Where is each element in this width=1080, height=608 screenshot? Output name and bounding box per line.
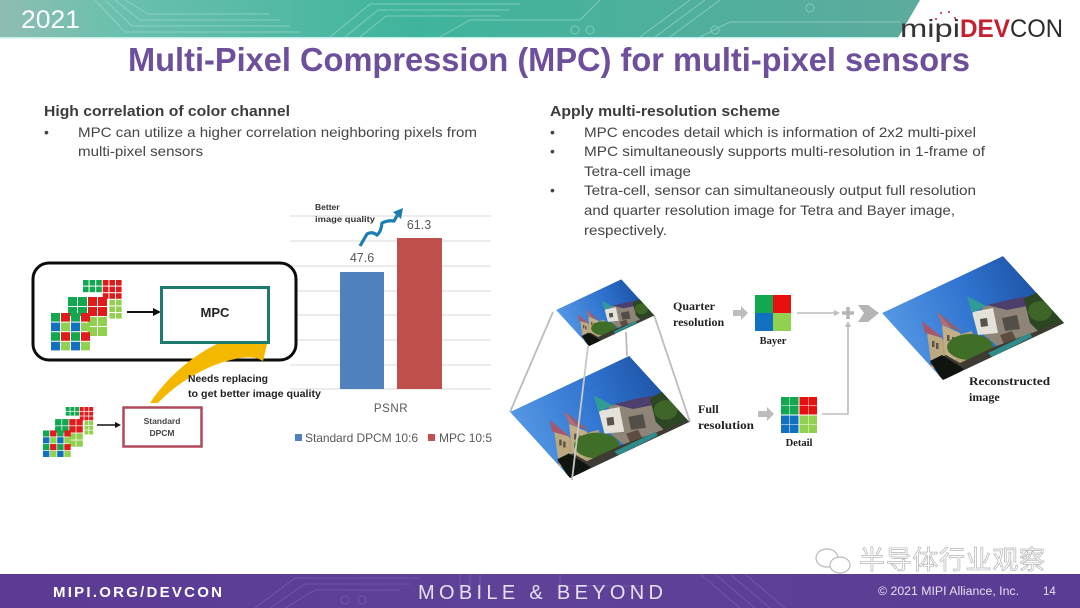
callout: needs replacing: to get better image quality bbox=[188, 388, 321, 400]
icon: wechat bbox=[816, 549, 850, 573]
icon: multi-pixel stack bbox=[51, 280, 122, 350]
arrow: full to Detail bbox=[758, 407, 774, 421]
right text block: • bbox=[550, 124, 555, 140]
image: quarter resolution bbox=[556, 279, 659, 349]
connector arrows to sum bbox=[797, 310, 851, 414]
footer bar bbox=[0, 574, 1080, 608]
label: reconstructed image: image bbox=[969, 390, 1000, 404]
right text block: • bbox=[550, 143, 555, 159]
callout: needs replacing bbox=[188, 373, 321, 400]
icon: small multi-pixel stack bbox=[43, 407, 93, 457]
diagram: multi-resolution pyramid bbox=[510, 279, 697, 483]
value 47.6: 47.6 bbox=[350, 251, 374, 265]
bar: MPC bbox=[397, 238, 442, 389]
box: Standard DPCM bbox=[124, 408, 202, 446]
pyramid front edge bbox=[572, 346, 588, 480]
left text block: multi-pixel sensors bbox=[78, 143, 203, 159]
panel: MPC pipeline bbox=[33, 263, 296, 360]
label: quarter resolution: Quarter bbox=[673, 299, 716, 313]
box: MPC bbox=[162, 288, 268, 342]
footer copyright: © 2021 MIPI Alliance, Inc. bbox=[878, 586, 1019, 598]
icon: plus bbox=[842, 307, 854, 319]
label: full resolution: resolution bbox=[698, 418, 754, 432]
callout: better image quality: Better bbox=[315, 202, 340, 212]
right text block: Tetra-cell, sensor can simultaneously output full resolution bbox=[584, 182, 976, 198]
panel: standard DPCM pipeline bbox=[43, 407, 202, 457]
logo: mipi DEVCON: mipi bbox=[900, 15, 960, 43]
box: MPC: MPC bbox=[201, 305, 230, 320]
year label 2021: 2021 bbox=[21, 6, 80, 34]
callout: needs replacing: Needs replacing bbox=[188, 373, 268, 385]
box: Standard DPCM: DPCM bbox=[149, 428, 175, 438]
left text block bbox=[44, 104, 477, 159]
icon: Detail grid bbox=[781, 397, 817, 433]
label: Detail: Detail bbox=[786, 438, 812, 449]
left text block: MPC can utilize a higher correlation neighboring pixels from bbox=[78, 124, 477, 140]
axis label PSNR: PSNR bbox=[374, 403, 408, 415]
right text block bbox=[550, 104, 985, 238]
right text block: respectively. bbox=[584, 222, 667, 238]
arrow to DPCM bbox=[97, 422, 121, 428]
left text block: • bbox=[44, 124, 49, 140]
arrow: to reconstructed image bbox=[858, 305, 879, 322]
footer tagline: MOBILE & BEYOND bbox=[418, 582, 663, 604]
right text block: • bbox=[550, 182, 555, 198]
watermark: 半导体行业观察 bbox=[859, 540, 1045, 577]
logo: mipi DEVCON bbox=[900, 11, 1063, 43]
callout: better image quality: image quality bbox=[315, 214, 375, 224]
label: reconstructed image: Reconstructed bbox=[969, 374, 1050, 388]
arrow: yellow swoosh bbox=[150, 344, 267, 403]
title: Multi-Pixel Compression (MPC) for multi-pixel sensors bbox=[128, 41, 970, 78]
label: Bayer: Bayer bbox=[760, 336, 787, 347]
box: Standard DPCM: Standard bbox=[144, 416, 180, 426]
arrow to MPC bbox=[127, 308, 161, 316]
value 61.3: 61.3 bbox=[407, 218, 431, 232]
header banner bbox=[0, 0, 1080, 38]
page number: 14 bbox=[1043, 586, 1056, 598]
label: full resolution: Full bbox=[698, 402, 719, 416]
image: reconstructed bbox=[882, 256, 1072, 385]
chart legend: Standard DPCM 10:6 bbox=[305, 431, 418, 445]
right text block: Tetra-cell image bbox=[584, 163, 691, 179]
bar: Standard DPCM bbox=[340, 272, 384, 389]
arrow: quarter to Bayer bbox=[733, 306, 748, 320]
label: quarter resolution: resolution bbox=[673, 315, 724, 329]
logo: mipi DEVCON: DEV bbox=[960, 15, 1010, 43]
label: reconstructed image bbox=[969, 374, 1050, 404]
chart legend bbox=[295, 431, 492, 445]
label: quarter resolution bbox=[673, 299, 724, 329]
bar chart: PSNR bbox=[290, 216, 492, 445]
pyramid lines bbox=[510, 312, 690, 422]
right text block: MPC simultaneously supports multi-resolution in 1-frame of bbox=[584, 143, 985, 159]
logo: mipi DEVCON: CON bbox=[1010, 15, 1063, 43]
left text block: High correlation of color channel bbox=[44, 104, 290, 120]
image: full resolution bbox=[510, 356, 697, 483]
chart legend: MPC 10:5 bbox=[439, 431, 492, 445]
right text block: MPC encodes detail which is information of 2x2 multi-pixel bbox=[584, 124, 976, 140]
right text block: and quarter resolution image for Tetra and Bayer image, bbox=[584, 202, 955, 218]
callout: better image quality bbox=[315, 202, 403, 246]
right text block: Apply multi-resolution scheme bbox=[550, 104, 780, 120]
icon: Bayer grid bbox=[755, 295, 791, 331]
label: full resolution bbox=[698, 402, 754, 432]
footer url: MIPI.ORG/DEVCON bbox=[53, 584, 222, 601]
